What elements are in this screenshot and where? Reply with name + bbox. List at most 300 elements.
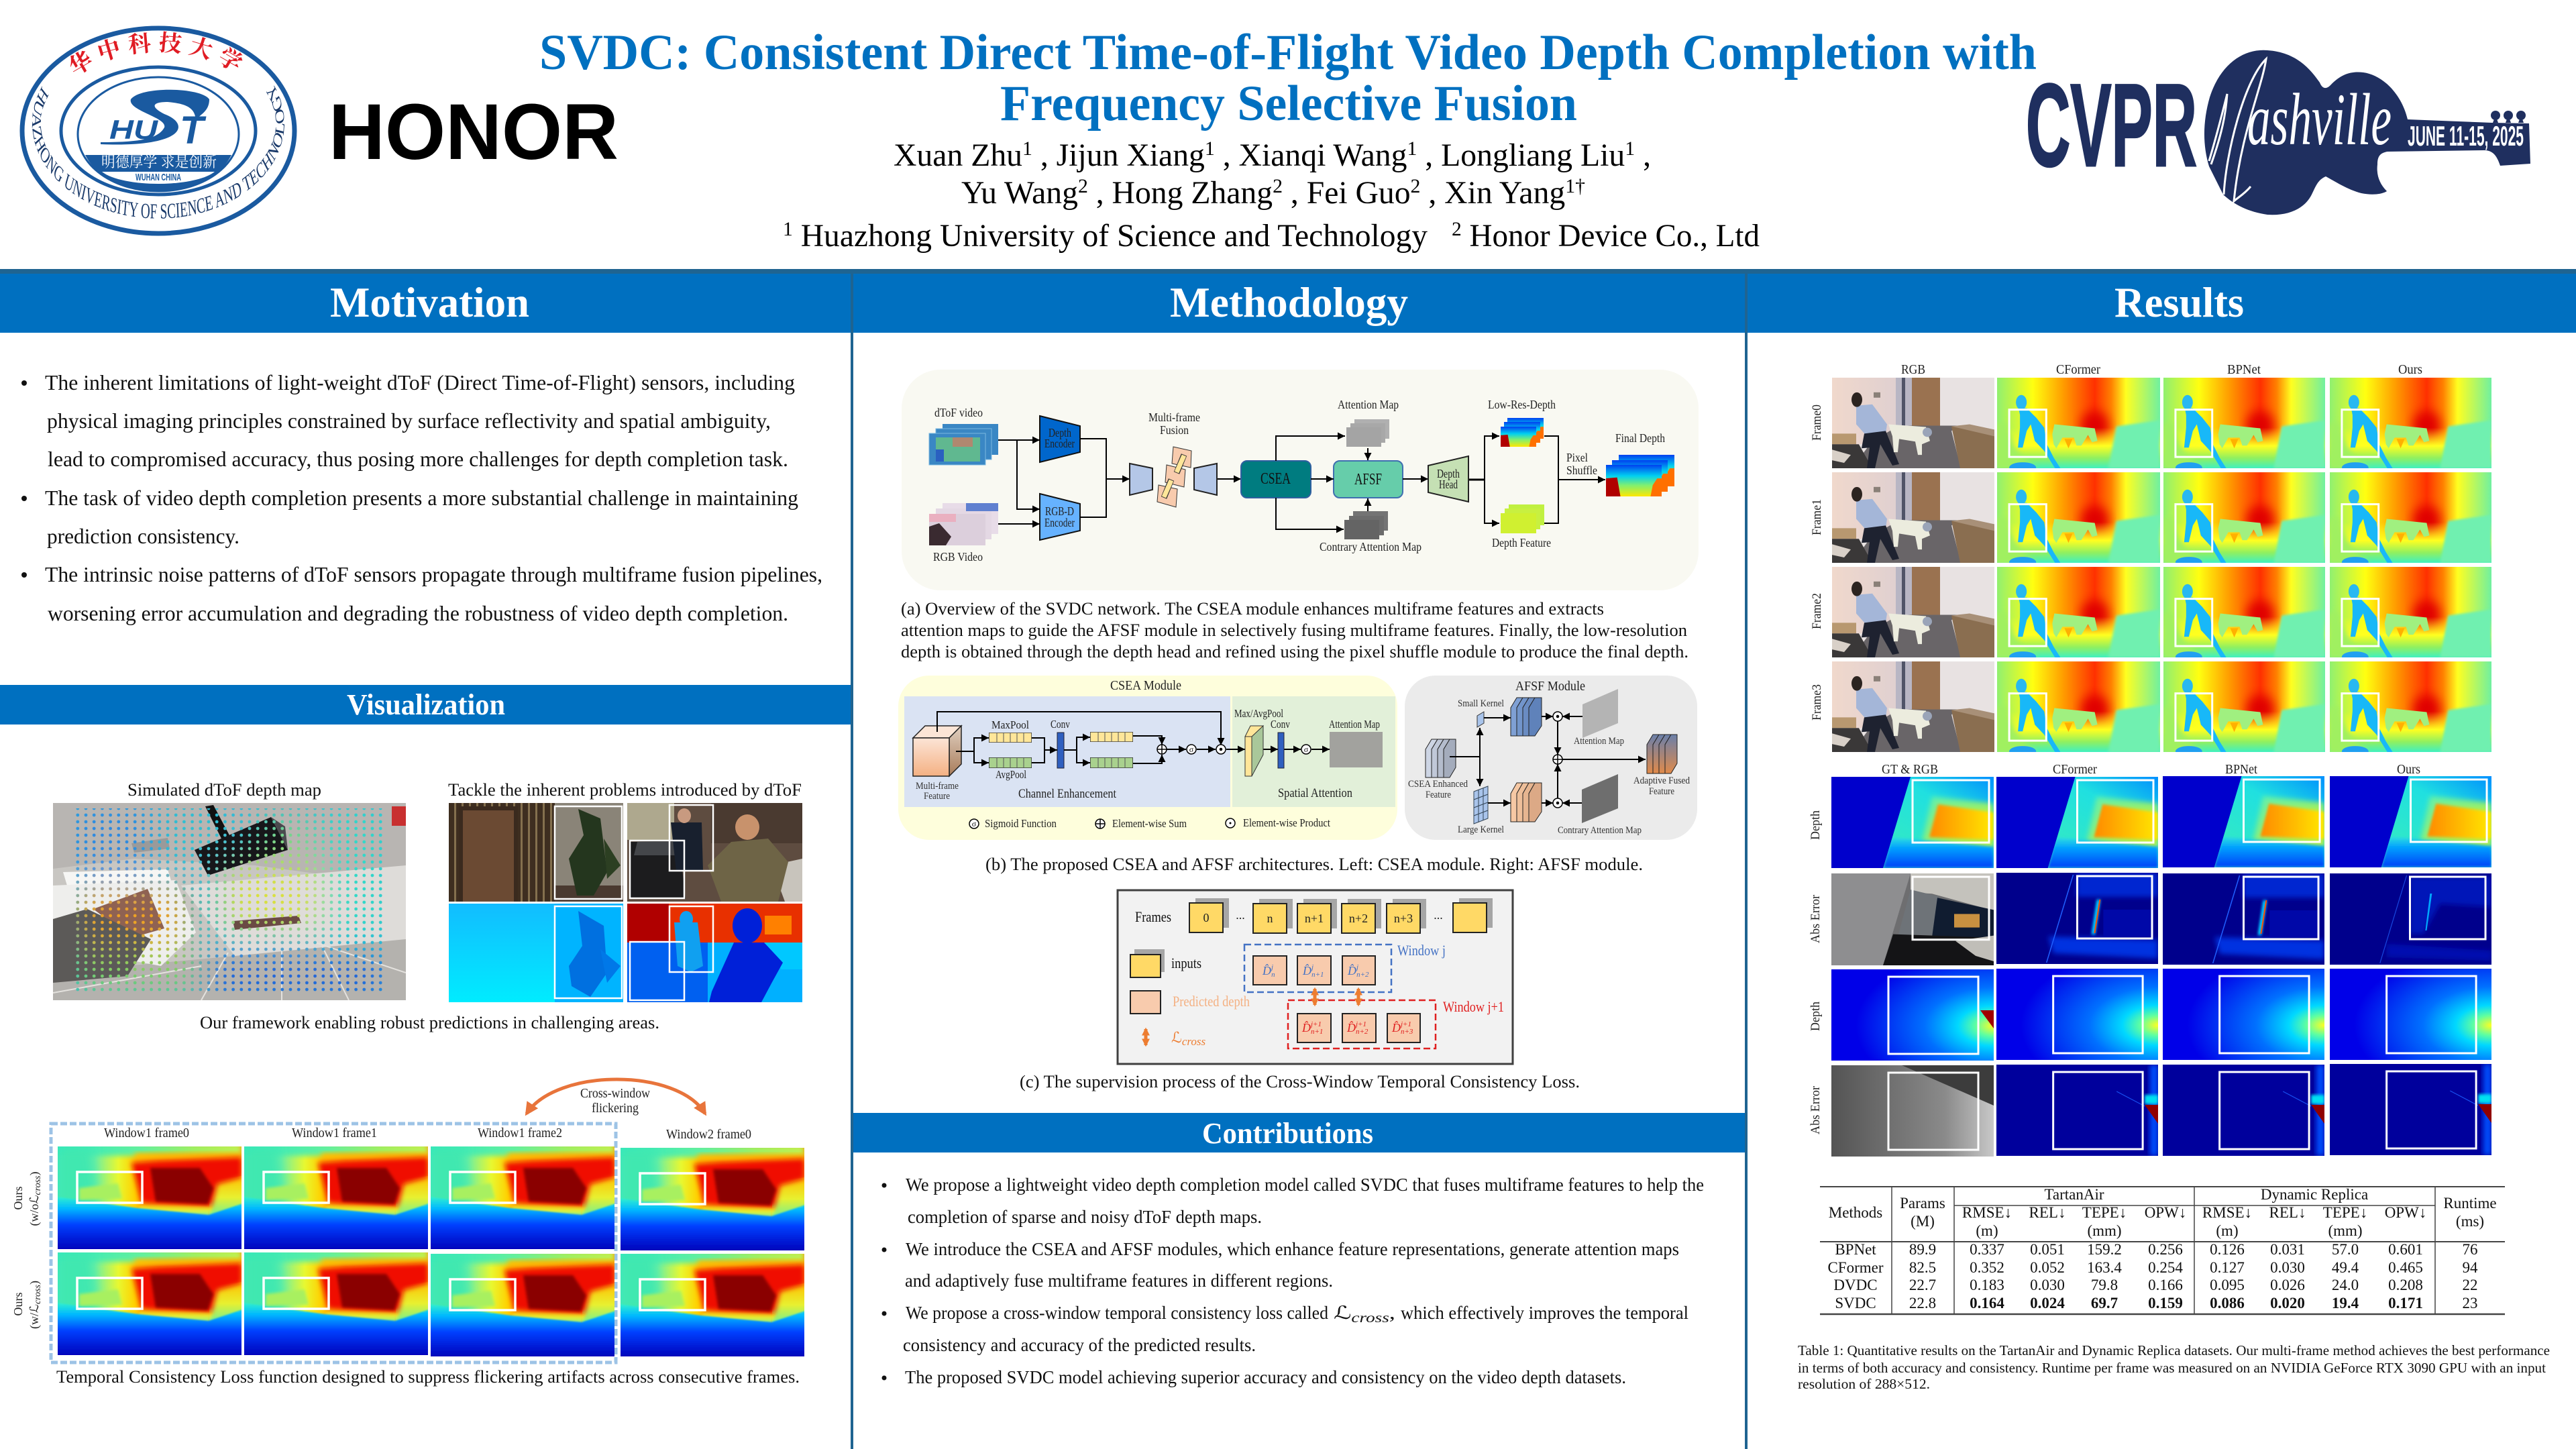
window j+1: n+3 <box>1401 1028 1413 1036</box>
icon: adaptive fused feature stack <box>1647 735 1677 773</box>
arrows: AFSF flow <box>1450 716 1646 803</box>
block: RGB-D Encoder: RGB-D <box>1045 504 1074 518</box>
icon: orange feature stack <box>1511 783 1542 822</box>
table header: Runtime <box>2443 1195 2497 1212</box>
text block: contributions bullets: consistency and accuracy of the predicted results. <box>903 1335 1256 1355</box>
legend: operators: Element-wise Sum <box>1112 817 1187 830</box>
label: attention map: Attention Map <box>1329 718 1380 731</box>
authors: Yu Wang <box>961 175 1079 211</box>
block: Depth Head <box>1428 456 1468 502</box>
table header <box>1829 1186 2497 1239</box>
table row: BPNet: 0.601 <box>2388 1241 2423 1258</box>
authors: , <box>1635 138 1651 173</box>
column labels: RGB <box>1901 362 1925 377</box>
authors: 1 <box>1407 138 1417 160</box>
row labels: Depth <box>1809 810 1823 840</box>
window j+1: j+1 <box>1354 1020 1366 1028</box>
label: CSEA enhanced feature: CSEA Enhanced <box>1408 779 1468 790</box>
icon: multi-frame feature cube: Multi-frame <box>916 781 959 792</box>
table header: TEPE↓ <box>2323 1204 2367 1221</box>
panel: visualization <box>0 685 851 1387</box>
table header: RMSE↓ <box>1962 1204 2012 1221</box>
block: RGB-D Encoder <box>1040 494 1080 540</box>
caption: CSEA and AFSF: (b) The proposed CSEA and AFSF architectures. Left: CSEA module. Right: AFSF module. <box>985 855 1643 874</box>
icon: large kernel: Large Kernel <box>1458 824 1504 835</box>
table row: SVDC: 0.171 <box>2388 1295 2423 1311</box>
panel: results frame comparison <box>1810 362 2491 757</box>
affiliations: Honor Device Co., Ltd <box>1462 218 1760 254</box>
table row: DVDC: 79.8 <box>2091 1277 2118 1293</box>
text block: contributions bullets: and adaptively fuse multiframe features in different regions. <box>905 1271 1333 1291</box>
authors: 2 <box>1078 175 1088 197</box>
table header: (mm) <box>2087 1222 2122 1239</box>
table row: CFormer: 0.030 <box>2270 1259 2305 1276</box>
image: hallway depth with plant <box>449 904 623 1002</box>
authors: , Jijun Xiang <box>1032 138 1205 173</box>
icon: contrary attention map stack: Contrary Attention Map <box>1558 825 1642 836</box>
table header: TEPE↓ <box>2082 1204 2127 1221</box>
column labels: Window1 frame1 <box>292 1126 377 1140</box>
text block: motivation bullets <box>21 370 822 625</box>
heading: Methodology: Methodology <box>1170 278 1408 326</box>
authors: 2 <box>1273 175 1283 197</box>
column labels <box>1882 762 2420 777</box>
window j: j <box>1310 963 1313 971</box>
row label: without cross loss: ) <box>28 1171 42 1175</box>
text block: motivation bullets: prediction consistency. <box>47 524 239 548</box>
window j+1: j+1 <box>1399 1020 1411 1028</box>
table row: DVDC: 0.183 <box>1970 1277 2004 1293</box>
caption: overview: attention maps to guide the AFSF module in selectively fusing multiframe features. Finally, the low-resolution <box>901 621 1687 640</box>
table row: CFormer: 49.4 <box>2332 1259 2359 1276</box>
table row: BPNet: 0.051 <box>2030 1241 2065 1258</box>
header: university logo: 华中科技大学 <box>70 31 243 72</box>
row: input frames: 0 <box>1203 911 1209 924</box>
table row: BPNet: 159.2 <box>2087 1241 2122 1258</box>
table row: CFormer: 0.352 <box>1970 1259 2004 1276</box>
caption: overview: (a) Overview of the SVDC network. The CSEA module enhances multiframe features and extracts <box>901 599 1604 619</box>
column labels: BPNet <box>2227 362 2261 377</box>
row: error scene 1 <box>1831 873 2491 965</box>
table header: (mm) <box>2328 1222 2363 1239</box>
table header: REL↓ <box>2029 1204 2065 1221</box>
row: input frames: n+1 <box>1305 912 1324 925</box>
table row: CFormer: 82.5 <box>1909 1259 1936 1276</box>
label: cross-window flickering: flickering <box>592 1101 639 1116</box>
row labels <box>1809 810 1823 1134</box>
panel: methodology overview diagram <box>902 370 1699 590</box>
icon: channel blocks: MaxPool <box>991 718 1029 731</box>
row: input frames: n+3 <box>1394 912 1413 925</box>
table row: DVDC: DVDC <box>1833 1277 1878 1293</box>
text block: contributions bullets: We introduce the CSEA and AFSF modules, which enhance feature representations, generate attention maps <box>906 1239 1679 1259</box>
window j <box>1244 942 1446 992</box>
table row: CFormer: 0.254 <box>2148 1259 2183 1276</box>
authors: , Fei Guo <box>1283 175 1411 211</box>
arrow: cross-window flickering <box>527 1079 705 1114</box>
sub-panel: channel enhancement <box>904 696 1230 807</box>
row: input frames <box>1189 898 1493 933</box>
authors: 1 <box>1625 138 1635 160</box>
icon: operators <box>1157 745 1311 754</box>
window j: n+1 <box>1311 971 1324 979</box>
table row: BPNet: 0.031 <box>2270 1241 2305 1258</box>
column labels: Window1 frame2 <box>478 1126 562 1140</box>
row labels: Depth <box>1809 1002 1823 1031</box>
image: simulated dToF depth map with dots <box>53 802 406 1000</box>
legend: inputs: inputs <box>1171 955 1201 971</box>
affiliations <box>783 218 1760 254</box>
window j+1: n+2 <box>1356 1028 1368 1036</box>
label: simulated dToF depth map: Simulated dToF depth map <box>127 780 321 800</box>
arrows: cross loss pairs <box>1315 989 1358 1005</box>
legend: operators: Element-wise Product <box>1243 816 1330 829</box>
icon: channel blocks <box>989 718 1133 781</box>
label: CSEA enhanced feature <box>1408 779 1468 800</box>
block: RGB-D Encoder: Encoder <box>1044 516 1075 529</box>
row label: with cross loss <box>11 1281 43 1329</box>
window j+1: D̂ <box>1302 1021 1311 1034</box>
icon: multi-frame feature cube <box>913 726 961 802</box>
row labels: Abs Error <box>1809 894 1823 943</box>
window j+1: D̂ <box>1392 1021 1401 1034</box>
icon: input feature stack <box>1426 739 1456 777</box>
text block: contributions bullets: ℒ <box>1334 1303 1346 1323</box>
row labels <box>1810 405 1824 720</box>
header: university logo: WUHAN CHINA <box>136 172 181 183</box>
table header: REL↓ <box>2269 1204 2306 1221</box>
table row: BPNet: BPNet <box>1835 1241 1876 1258</box>
header: university logo: 明德厚学 求是创新 <box>101 151 217 172</box>
image: hallway RGB with plant <box>449 803 623 902</box>
row: frame 3 <box>1832 661 2491 757</box>
label: frames: Frames <box>1135 908 1171 925</box>
table row: DVDC: 22 <box>2462 1277 2478 1293</box>
icon: contrary attention map stack: Contrary Attention Map <box>1320 540 1421 553</box>
table: quantitative results <box>1820 1186 2505 1314</box>
authors <box>894 138 1651 211</box>
icon: RGB video stack <box>929 503 998 564</box>
icon: dToF video stack: dToF video <box>934 406 983 419</box>
table row: CFormer: CFormer <box>1827 1259 1884 1276</box>
window j: n <box>1271 971 1275 979</box>
caption: table 1: resolution of 288×512. <box>1798 1376 1930 1392</box>
legend: cross loss <box>1146 1029 1206 1048</box>
title: Frequency Selective Fusion <box>1000 76 1577 131</box>
header: CVPR Nashville logo <box>2026 50 2530 215</box>
panel: results depth and error comparison <box>1809 762 2491 1157</box>
affiliations: Huazhong University of Science and Technology <box>793 218 1428 254</box>
arrows: channel enhancement flow <box>937 712 1330 763</box>
block: AFSF: AFSF <box>1354 471 1382 488</box>
legend: inputs <box>1130 949 1201 977</box>
window j: D̂ <box>1263 964 1271 977</box>
label: cross-window flickering: Cross-window <box>580 1086 650 1101</box>
column labels: Window1 frame0 <box>104 1126 189 1140</box>
row: input frames: n+2 <box>1349 912 1368 925</box>
authors: 1 <box>1205 138 1215 160</box>
text block: motivation bullets: physical imaging principles constrained by surface reflectivity and spatial ambiguity, <box>47 409 771 433</box>
block: Depth Encoder: Depth <box>1049 426 1071 439</box>
panel: CSEA module <box>898 676 1397 840</box>
panel: CSEA module: CSEA Module <box>1110 678 1181 693</box>
authors: 1† <box>1565 175 1585 197</box>
table header: Dynamic Replica <box>2261 1186 2368 1203</box>
label: tackle inherent problems: Tackle the inherent problems introduced by dToF <box>448 780 802 800</box>
heading: Visualization: Visualization <box>347 688 505 721</box>
column labels <box>104 1126 751 1142</box>
table header: (M) <box>1911 1213 1935 1230</box>
authors: , Xin Yang <box>1420 175 1565 211</box>
legend: operators <box>969 816 1330 830</box>
table header: Params <box>1900 1195 1945 1212</box>
column labels: Ours <box>2397 762 2420 777</box>
table row: DVDC: 0.208 <box>2388 1277 2423 1293</box>
icon: operators: σ <box>1304 745 1309 754</box>
caption: table 1: Table 1: Quantitative results on the TartanAir and Dynamic Replica datasets. Our multi-frame method achieves the best performance <box>1798 1342 2550 1358</box>
row: error scene 2 <box>1831 1064 2491 1157</box>
legend: operators: Sigmoid Function <box>985 817 1057 830</box>
icon: low-res depth stack: Low-Res-Depth <box>1488 398 1556 411</box>
icon: pooled attention block <box>1245 726 1263 776</box>
table row: SVDC: 0.164 <box>1970 1295 2004 1311</box>
icon: attention map image <box>1330 732 1383 767</box>
window j: D̂ <box>1303 964 1311 977</box>
caption: table 1 <box>1798 1342 2550 1392</box>
caption: overview: depth is obtained through the depth head and refined using the pixel shuffle module to produce the final depth. <box>901 642 1688 661</box>
window j+1: Window j+1 <box>1443 998 1504 1015</box>
block: multi-frame fusion: Multi-frame <box>1148 411 1200 424</box>
chart: depth maps with cross loss <box>56 1248 806 1358</box>
authors: Xuan Zhu <box>894 138 1023 173</box>
label: CSEA enhanced feature: Feature <box>1426 790 1451 800</box>
block: Depth Head: Head <box>1439 478 1458 491</box>
chart: depth maps without cross loss <box>56 1142 806 1252</box>
window j: D̂ <box>1348 964 1356 977</box>
authors: , Xianqi Wang <box>1215 138 1407 173</box>
window 1 dashed frame <box>51 1124 616 1362</box>
table header: RMSE↓ <box>2202 1204 2252 1221</box>
table row: SVDC: 0.020 <box>2270 1295 2305 1311</box>
icon: attention map stack <box>1338 398 1399 447</box>
text block: contributions bullets: We propose a cross-window temporal consistency loss called <box>906 1303 1328 1323</box>
text block: contributions bullets: We propose a lightweight video depth completion model called SVDC that fuses multiframe features to help the <box>906 1175 1704 1195</box>
panel: cross-window loss diagram <box>1118 890 1513 1064</box>
icon: conv bar <box>1278 733 1284 768</box>
text block: contributions bullets: , <box>1389 1303 1395 1323</box>
authors: 1 <box>1022 138 1032 160</box>
table header: Methods <box>1829 1204 1882 1221</box>
caption: temporal consistency: Temporal Consistency Loss function designed to suppress flickering artifacts across consecutive frames. <box>56 1367 800 1387</box>
panel: AFSF module <box>1405 676 1697 840</box>
header: university logo: HU <box>109 115 158 145</box>
window j+1: j+1 <box>1309 1020 1322 1028</box>
header: CVPR Nashville logo: CVPR <box>2026 60 2197 191</box>
text block: motivation bullets: worsening error accumulation and degrading the robustness of video depth completion. <box>48 601 788 625</box>
table row: DVDC: 24.0 <box>2332 1277 2359 1293</box>
authors: , Hong Zhang <box>1088 175 1273 211</box>
header: HONOR logo: HONOR <box>329 88 619 176</box>
image: two men RGB <box>627 803 802 902</box>
block: Depth Encoder <box>1040 416 1080 462</box>
table row: BPNet: 89.9 <box>1909 1241 1936 1258</box>
column labels: Window2 frame0 <box>666 1127 751 1142</box>
icon: attention map stack: Attention Map <box>1574 736 1624 747</box>
arrows: encoder inputs and fusion input <box>998 439 1241 524</box>
table row: DVDC: 0.026 <box>2270 1277 2305 1293</box>
heading: Contributions <box>853 1113 1745 1152</box>
authors: , Longliang Liu <box>1417 138 1625 173</box>
column labels: GT & RGB <box>1882 762 1938 777</box>
icon: final depth stack: Final Depth <box>1615 431 1665 445</box>
row: input frames: ... <box>1434 908 1443 922</box>
row label: without cross loss: (w/oℒ <box>28 1195 41 1226</box>
row: frame 1 <box>1832 472 2491 568</box>
icon: contrary attention map stack <box>1558 774 1642 836</box>
header: university logo: HUAZHONG UNIVERSITY OF SCIENCE AND TECHNOLOGY <box>32 86 284 219</box>
text block: contributions bullets: The proposed SVDC model achieving superior accuracy and consistency on the video depth datasets. <box>905 1367 1626 1387</box>
caption: cross-window loss: (c) The supervision process of the Cross-Window Temporal Consistency Loss. <box>1020 1072 1580 1091</box>
icon: attention map stack: Attention Map <box>1338 398 1399 411</box>
icon: dToF video stack <box>929 406 998 465</box>
table row: DVDC: 0.095 <box>2210 1277 2245 1293</box>
text block: contributions bullets: completion of sparse and noisy dToF depth maps. <box>908 1207 1262 1227</box>
row: depth scene 1 <box>1831 776 2491 868</box>
caption: overview <box>901 599 1688 661</box>
window j: n+2 <box>1356 971 1369 979</box>
table row: SVDC: 0.086 <box>2210 1295 2245 1311</box>
block: CSEA: CSEA <box>1260 470 1291 488</box>
table row: DVDC: 22.7 <box>1909 1277 1936 1293</box>
sub-panel: spatial attention <box>1232 696 1395 807</box>
heading: Contributions: Contributions <box>1202 1117 1373 1150</box>
table row: SVDC: 19.4 <box>2332 1295 2359 1311</box>
table row: CFormer: 0.465 <box>2388 1259 2423 1276</box>
text block: motivation bullets: The task of video depth completion presents a more substantial challenge in maintaining <box>45 486 798 510</box>
caption: table 1: in terms of both accuracy and consistency. Runtime per frame was measured on an NVIDIA GeForce RTX 3090 GPU with an input <box>1798 1360 2546 1376</box>
row label: without cross loss: Ours <box>11 1186 25 1210</box>
icon: small kernel <box>1458 698 1504 727</box>
label: pixel shuffle: Pixel <box>1566 451 1588 464</box>
affiliations: 2 <box>1452 218 1462 240</box>
table rules <box>1820 1187 2505 1314</box>
table row: DVDC: 0.166 <box>2148 1277 2183 1293</box>
table row: SVDC: 0.024 <box>2030 1295 2065 1311</box>
row labels: Frame1 <box>1810 499 1824 535</box>
window j: j <box>1355 963 1358 971</box>
table row: BPNet: 57.0 <box>2332 1241 2359 1258</box>
row label: with cross loss: (w/ℒ <box>28 1304 41 1329</box>
window j: Window j <box>1397 942 1446 959</box>
label: channel enhancement: Channel Enhancement <box>1018 787 1117 801</box>
label: max and average pool: Max/AvgPool <box>1234 707 1283 720</box>
label: conv: Conv <box>1271 718 1290 731</box>
column labels: CFormer <box>2053 762 2097 777</box>
table header: OPW↓ <box>2385 1204 2426 1221</box>
legend: predicted depth: Predicted depth <box>1173 993 1250 1010</box>
icon: channel blocks: AvgPool <box>996 768 1026 781</box>
row labels: Frame3 <box>1810 684 1824 720</box>
table row: SVDC: 22.8 <box>1909 1295 1936 1311</box>
icon: channel blocks: Conv <box>1051 718 1070 731</box>
text block: contributions bullets: cross <box>1351 1311 1389 1326</box>
label: adaptive fused feature <box>1633 775 1690 797</box>
label: spatial attention: Spatial Attention <box>1278 786 1352 800</box>
table row: DVDC: 0.030 <box>2030 1277 2065 1293</box>
row: depth scene 2 <box>1831 969 2491 1061</box>
row: frame 0 <box>1832 378 2491 473</box>
label: adaptive fused feature: Adaptive Fused <box>1633 775 1690 786</box>
block: multi-frame fusion <box>1130 411 1217 507</box>
row: frame 2 <box>1832 567 2491 662</box>
panel: AFSF module: AFSF Module <box>1515 679 1585 694</box>
header: university logo: T <box>180 109 207 152</box>
heading: Motivation: Motivation <box>330 278 529 326</box>
window j+1: n+1 <box>1311 1028 1323 1036</box>
column labels: BPNet <box>2225 762 2257 777</box>
title <box>539 25 2037 131</box>
table row: BPNet: 0.256 <box>2148 1241 2183 1258</box>
window j+1: D̂ <box>1347 1021 1356 1034</box>
row label: with cross loss: cross <box>33 1284 43 1304</box>
label: pixel shuffle: Shuffle <box>1566 464 1597 477</box>
row label: with cross loss: ) <box>28 1281 42 1285</box>
icon: blue feature stack <box>1511 698 1542 736</box>
icon: depth feature stack <box>1492 504 1551 549</box>
row labels: Frame0 <box>1810 405 1824 441</box>
icon: contrary attention map stack <box>1320 511 1421 553</box>
table row: CFormer: 94 <box>2462 1259 2478 1276</box>
title: SVDC: Consistent Direct Time-of-Flight Video Depth Completion with <box>539 25 2037 80</box>
block: AFSF <box>1334 461 1403 498</box>
table header: (m) <box>2216 1222 2239 1239</box>
column labels: CFormer <box>2056 362 2100 377</box>
label: cross-window flickering <box>580 1086 650 1116</box>
table row: BPNet: 0.126 <box>2210 1241 2245 1258</box>
text block: contributions bullets <box>881 1175 1704 1387</box>
row labels: Frame2 <box>1810 593 1824 629</box>
row label: without cross loss <box>11 1171 43 1226</box>
table row: BPNet <box>1835 1241 2478 1258</box>
table row: SVDC: 23 <box>2462 1295 2478 1311</box>
row label: with cross loss: Ours <box>11 1292 25 1316</box>
heading: Results: Results <box>2114 278 2244 326</box>
icon: small kernel: Small Kernel <box>1458 698 1504 709</box>
icon: AFSF operators <box>1553 712 1562 808</box>
icon: attention map stack <box>1574 689 1624 747</box>
icon: operators: σ <box>1189 745 1194 754</box>
label: pixel shuffle <box>1566 451 1597 477</box>
row: input frames: n <box>1267 912 1273 925</box>
table row: CFormer <box>1827 1259 2478 1276</box>
table row: SVDC: SVDC <box>1835 1295 1876 1311</box>
row: input frames: ... <box>1236 908 1245 922</box>
icon: depth feature stack: Depth Feature <box>1492 536 1551 549</box>
table row: BPNet: 76 <box>2462 1241 2478 1258</box>
header: university logo <box>20 25 297 236</box>
table row: SVDC: 0.159 <box>2148 1295 2183 1311</box>
icon: large kernel <box>1458 786 1504 835</box>
icon: low-res depth stack <box>1488 398 1556 447</box>
arrows: attention flow <box>1276 436 1605 529</box>
table header: (ms) <box>2456 1213 2484 1230</box>
icon: RGB video stack: RGB Video <box>933 550 983 564</box>
block: Depth Encoder: Encoder <box>1044 437 1075 450</box>
icon: multi-frame feature cube: Feature <box>924 791 950 802</box>
table row: CFormer: 163.4 <box>2087 1259 2122 1276</box>
text block: motivation bullets: The inherent limitations of light-weight dToF (Direct Time-of-Flight) sensors, including <box>45 370 795 394</box>
text block: motivation bullets: The intrinsic noise patterns of dToF sensors propagate through multiframe fusion pipelines, <box>45 562 822 586</box>
